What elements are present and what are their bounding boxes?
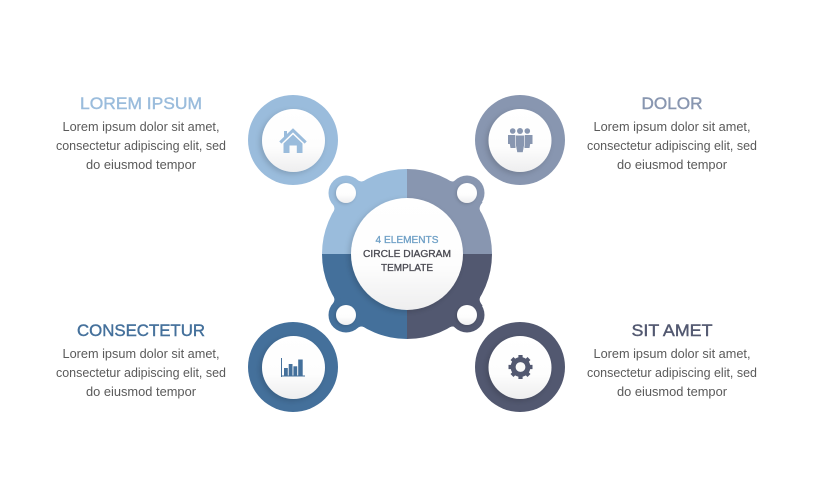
small white dots [336,183,477,325]
centre label: CIRCLE DIAGRAM [363,249,451,260]
text block: dolor: DOLOR [642,95,703,113]
text block: dolor [587,95,757,172]
text block: sit amet: consectetur adipiscing elit, sed [587,365,757,380]
text block: lorem ipsum [56,95,226,172]
icon: bar chart [281,358,305,377]
text block: consectetur: CONSECTETUR [77,322,205,340]
icon: people [508,128,532,152]
centre label: TEMPLATE [381,263,433,274]
badge: dolor [475,95,565,185]
text block: consectetur [56,322,226,399]
text block: sit amet: Lorem ipsum dolor sit amet, [594,346,750,361]
centre label [363,235,451,274]
text block: lorem ipsum: LOREM IPSUM [80,95,202,113]
text block: lorem ipsum: consectetur adipiscing elit, sed [56,138,226,153]
text block: lorem ipsum: do eiusmod tempor [86,157,197,172]
icon: gear [508,355,532,379]
text block: consectetur: Lorem ipsum dolor sit amet, [62,346,220,361]
segment: steel blue [322,254,407,339]
badge: consectetur [248,322,338,412]
centre label: 4 ELEMENTS [376,235,439,246]
central circle diagram [322,169,492,339]
text block: consectetur: do eiusmod tempor [86,384,197,399]
text block: dolor: Lorem ipsum dolor sit amet, [594,119,750,134]
segment: light blue [322,169,407,254]
centre white circle [351,198,463,310]
segment: grey blue [407,169,492,254]
text block: lorem ipsum: Lorem ipsum dolor sit amet, [62,119,220,134]
text block: dolor: do eiusmod tempor [617,157,728,172]
segment: dark slate [407,254,492,339]
badge: sit amet [475,322,565,412]
text block: sit amet: SIT AMET [632,322,712,340]
text block: consectetur: consectetur adipiscing elit, sed [56,365,226,380]
text block: sit amet: do eiusmod tempor [617,384,728,399]
text block: sit amet [587,322,757,399]
text block: dolor: consectetur adipiscing elit, sed [587,138,757,153]
badge: lorem ipsum [248,95,338,185]
icon: house [280,130,306,153]
